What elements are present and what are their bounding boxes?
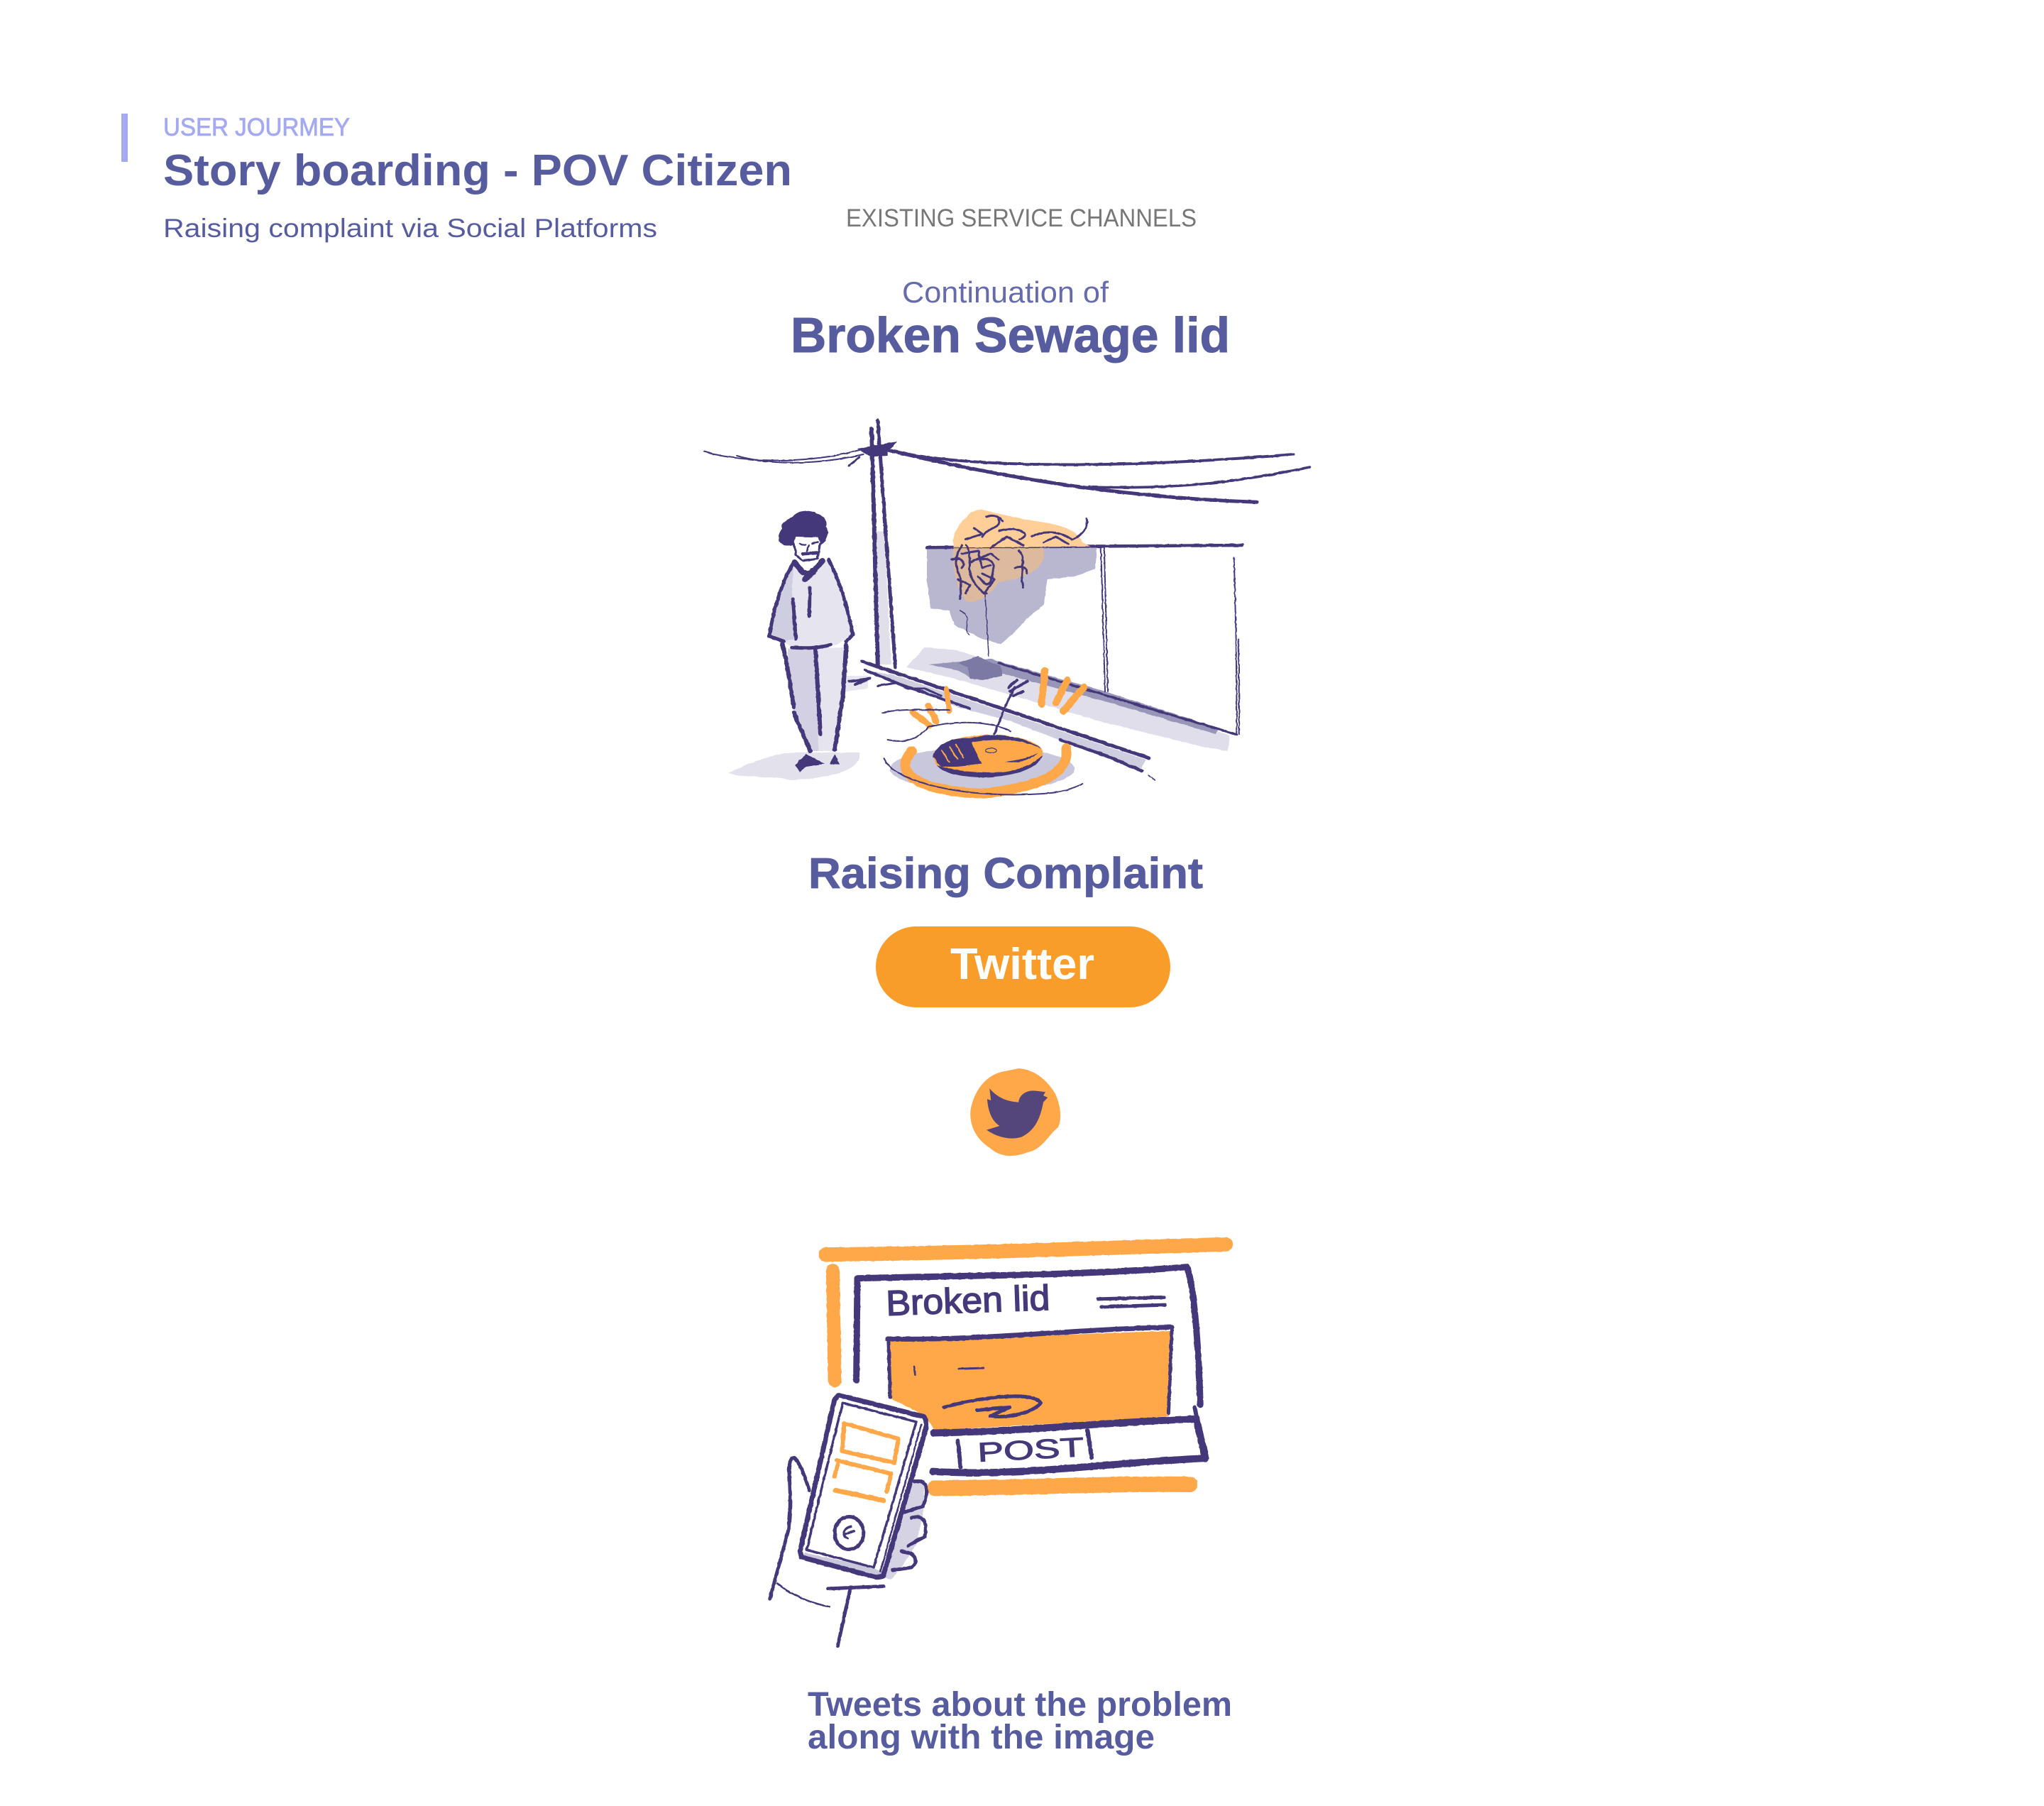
handwritten heading on sketch: Broken lid (885, 1278, 1050, 1323)
channel pill: twitter: Twitter (950, 940, 1094, 989)
icon: twitter bird on orange blob (970, 1068, 1060, 1156)
handwritten post button label: POST (977, 1433, 1084, 1468)
trousers (788, 647, 845, 751)
step description: along with the image (808, 1719, 1155, 1756)
man figure (769, 511, 853, 772)
tweet image area (889, 1331, 1171, 1430)
step description (808, 1686, 1232, 1756)
section label: existing service channels: EXISTING SERVICE CHANNELS (846, 204, 1197, 232)
continuation heading: Continuation of (902, 275, 1109, 309)
eyebrow label: USER JOURMEY (163, 114, 350, 141)
step description: Tweets about the problem (808, 1686, 1232, 1724)
tweet card outline (857, 1267, 1200, 1417)
hair (779, 511, 828, 546)
phone (800, 1395, 926, 1577)
broken sewage lid (882, 680, 1082, 794)
illustration: hand holding phone, tweeting post (770, 1244, 1226, 1646)
orange crack marks (913, 671, 1084, 726)
post button bar (933, 1407, 1206, 1473)
outlines (793, 542, 820, 561)
shoes (795, 754, 825, 772)
illustration: man beside broken sewage lid (704, 420, 1310, 794)
shirt (769, 559, 852, 648)
ground and wall shadows (728, 548, 1230, 780)
hand (770, 1458, 927, 1646)
channel pill: twitter (876, 926, 1170, 1007)
utility pole (857, 420, 897, 667)
plant with orange foliage (952, 510, 1091, 656)
subtitle: Raising complaint via Social Platforms (163, 214, 657, 243)
orange frame strokes (825, 1244, 1226, 1488)
phone screen content (835, 1423, 899, 1492)
main heading: broken sewage lid: Broken Sewage lid (791, 307, 1230, 363)
accent bar (121, 114, 128, 162)
header block (121, 114, 792, 243)
curb (849, 656, 1237, 780)
overhead wires (704, 450, 1310, 502)
title: Story boarding - POV Citizen (163, 146, 792, 195)
step heading: raising complaint: Raising Complaint (808, 849, 1203, 897)
wall outlines (927, 545, 1242, 734)
